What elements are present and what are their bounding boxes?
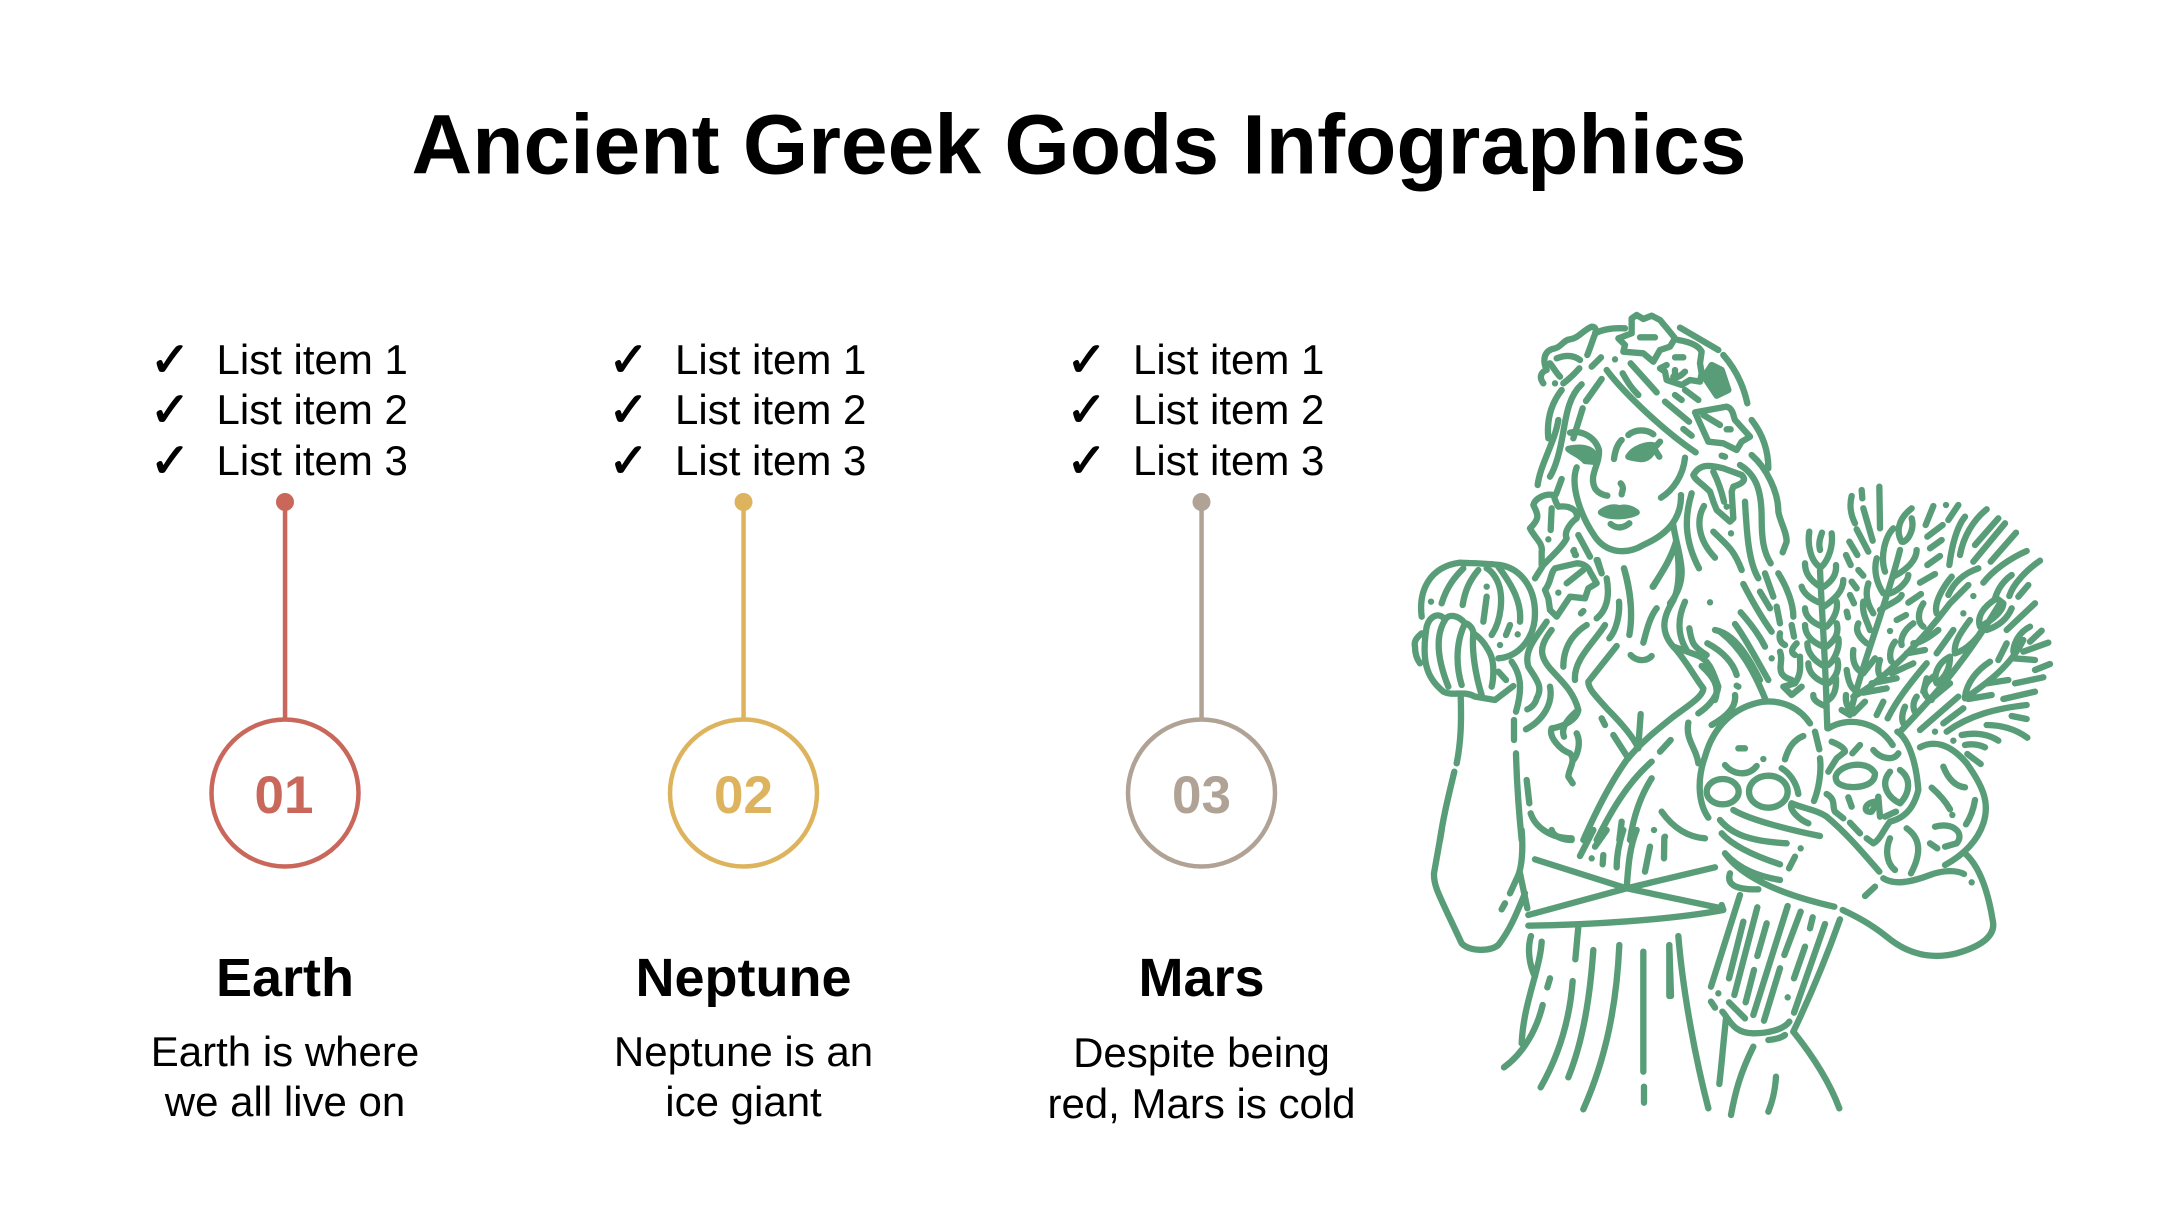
- cornucopia horn and lower drape: [1669, 895, 1840, 1115]
- checklist: List item 3: [216, 437, 408, 484]
- number badge 01: [212, 720, 358, 866]
- checklist: [1066, 332, 1324, 489]
- checklist: ✓: [150, 382, 190, 438]
- connector line: [276, 493, 294, 720]
- title: Ancient Greek Gods Infographics: [412, 98, 1746, 192]
- number badge 03: [1128, 720, 1275, 866]
- checklist: ✓: [608, 382, 649, 438]
- checklist: [608, 332, 866, 489]
- goddess head and wreath: [1530, 315, 1787, 605]
- checklist: List item 1: [1133, 336, 1324, 383]
- connector line: [734, 493, 752, 720]
- description: Earth is where: [151, 1028, 419, 1075]
- checklist: ✓: [608, 332, 649, 388]
- panel: Earth column: [150, 332, 419, 1125]
- checklist: ✓: [1066, 332, 1107, 388]
- checklist: [150, 332, 408, 489]
- number badge 02: 02: [714, 766, 773, 825]
- left arm, sash and skirt: [1434, 830, 1723, 1109]
- connector line: [1192, 493, 1210, 720]
- fruit held in hand and torso: [1415, 540, 1760, 840]
- checklist: ✓: [608, 433, 649, 489]
- description: we all live on: [164, 1078, 405, 1125]
- checklist: List item 3: [1133, 437, 1324, 484]
- checklist: List item 1: [216, 336, 408, 383]
- description: ice giant: [665, 1078, 822, 1125]
- checklist: ✓: [150, 332, 190, 388]
- number badge 03: 03: [1172, 766, 1231, 825]
- description: Neptune is an: [614, 1028, 873, 1075]
- checklist: List item 2: [1133, 386, 1324, 433]
- number badge 01: 01: [255, 766, 313, 825]
- checklist: ✓: [1066, 433, 1107, 489]
- illustration: goddess with harvest: [1415, 315, 2050, 1115]
- checklist: List item 1: [675, 336, 866, 383]
- panel: Neptune column: [608, 332, 873, 1125]
- checklist: List item 2: [675, 386, 866, 433]
- checklist: List item 3: [675, 437, 866, 484]
- checklist: ✓: [1066, 382, 1107, 438]
- heading: Mars: Mars: [1138, 948, 1265, 1008]
- panel: Mars column: [1047, 332, 1356, 1127]
- checklist: List item 2: [216, 386, 408, 433]
- checklist: ✓: [150, 433, 190, 489]
- description: red, Mars is cold: [1047, 1080, 1356, 1127]
- description: Despite being: [1073, 1029, 1330, 1076]
- heading: Earth: Earth: [216, 948, 354, 1008]
- wheat sheaf: [1720, 487, 2050, 764]
- heading: Neptune: Neptune: [636, 948, 852, 1008]
- cornucopia fruits and right arm: [1700, 701, 1993, 956]
- number badge 02: [670, 720, 817, 866]
